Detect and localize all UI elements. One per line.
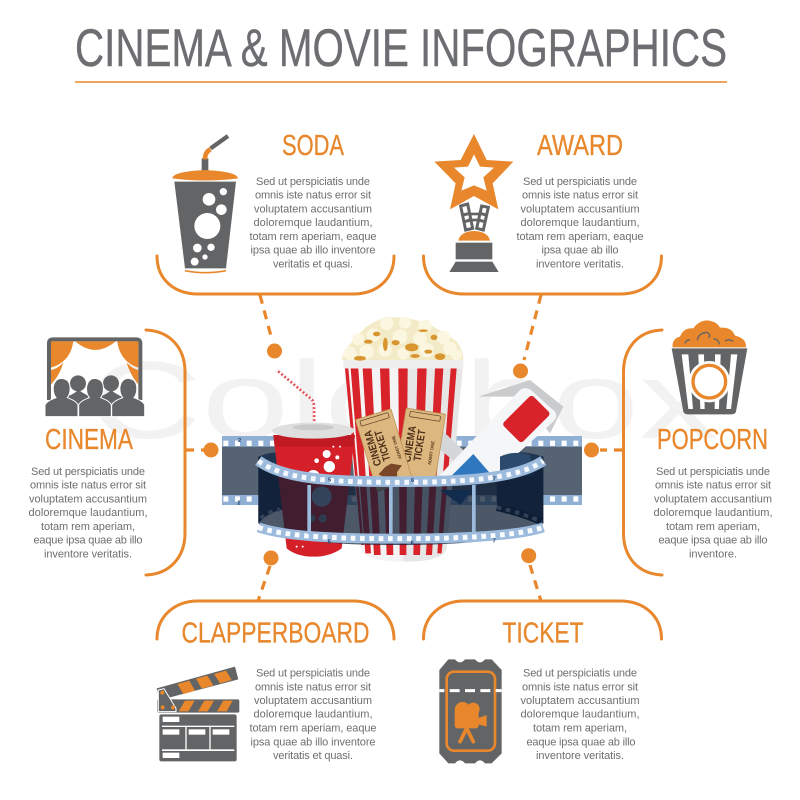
text block: cinema: totam rem aperiam, <box>41 521 135 533</box>
text block: cinema: omnis iste natus error sit <box>30 480 146 492</box>
film loop front: 6 <box>411 478 414 484</box>
text block: popcorn: Sed ut perspiciatis unde <box>656 466 770 478</box>
film loop front <box>258 457 543 546</box>
icon: award star trophy <box>434 134 513 272</box>
text block: clapperboard: doloremque laudantium, <box>254 709 372 721</box>
text block: soda: doloremque laudantium, <box>254 217 372 229</box>
text block: popcorn: totam rem aperiam, <box>666 521 760 533</box>
text block: cinema: doloremque laudantium, <box>28 507 148 519</box>
panel: clapperboard <box>157 550 394 762</box>
film loop front: 5 <box>328 477 331 483</box>
movie tickets: TICKET <box>373 428 393 462</box>
text block: clapperboard: voluptatem accusantium <box>254 695 372 707</box>
text block: clapperboard: omnis iste natus error sit <box>255 681 371 693</box>
popcorn bucket <box>343 360 463 562</box>
text block: clapperboard: Sed ut perspiciatis unde <box>256 668 370 680</box>
back film strip: 2 <box>238 438 241 444</box>
text block: award: Sed ut perspiciatis unde <box>523 176 637 188</box>
film loop back <box>258 451 543 523</box>
film loop front: 7 <box>493 476 496 482</box>
text block: clapperboard <box>250 668 376 762</box>
text block: popcorn: doloremque laudantium, <box>654 507 772 519</box>
text block: soda: veritatis et quasi. <box>273 259 353 271</box>
film loop front: 6 <box>411 540 414 546</box>
icon: soda cup <box>172 136 238 273</box>
back film strip <box>222 436 582 506</box>
movie tickets: ADMIT ONE <box>391 435 403 460</box>
text block: clapperboard: ipsa quae ab illo inventore <box>250 736 376 748</box>
panel: award <box>424 130 662 378</box>
movie tickets: CINEMA <box>401 425 419 463</box>
text block: award: totam rem aperiam, eaque <box>516 231 644 243</box>
bracket and connector: soda <box>157 256 394 358</box>
text block: award: ipsa quae ab illo <box>542 245 618 257</box>
movie tickets <box>355 408 446 491</box>
text block: popcorn: inventore. <box>689 549 737 561</box>
text block: award: voluptatem accusantium <box>520 203 640 215</box>
bracket and connector: clapperboard <box>157 550 394 639</box>
heading: award: AWARD <box>537 130 623 162</box>
text block: ticket: totam rem aperiam, <box>533 722 627 734</box>
text block: soda: ipsa quae ab illo inventore <box>250 245 376 257</box>
text block: cinema <box>28 466 148 561</box>
text block: cinema: voluptatem accusantium <box>29 493 147 505</box>
panel: popcorn <box>584 320 772 575</box>
popcorn <box>342 317 463 361</box>
text block: cinema: Sed ut perspiciatis unde <box>31 466 145 478</box>
soda cup <box>272 370 355 557</box>
bracket and connector: cinema <box>146 330 218 575</box>
movie tickets: CINEMA <box>362 429 384 467</box>
text block: soda: omnis iste natus error sit <box>255 190 371 202</box>
text block: ticket: inventore veritatis. <box>536 750 624 762</box>
text block: award: doloremque laudantium, <box>520 217 640 229</box>
text block: ticket: omnis iste natus error sit <box>522 681 638 693</box>
text block: popcorn <box>654 466 772 561</box>
icon: cinema audience <box>45 339 145 417</box>
central illustration: film, soda, popcorn, tickets, 3D glasses <box>222 317 582 562</box>
text block: ticket <box>520 668 640 762</box>
film loop front: 5 <box>328 540 331 546</box>
panel: ticket <box>424 548 662 763</box>
film loop front: 7 <box>493 539 496 545</box>
text block: ticket: eaque ipsa quae ab illo <box>526 736 636 748</box>
heading: popcorn: POPCORN <box>657 424 768 456</box>
heading: ticket: TICKET <box>502 618 584 650</box>
text block: ticket: Sed ut perspiciatis unde <box>523 668 637 680</box>
bracket and connector: award <box>424 256 662 378</box>
panel: cinema <box>28 330 218 575</box>
text block: award <box>516 176 644 271</box>
3D glasses <box>437 380 563 505</box>
text block: soda: voluptatem accusantium <box>254 203 372 215</box>
text block: clapperboard: totam rem aperiam, eaque <box>250 722 376 734</box>
movie tickets: TICKET <box>412 428 429 462</box>
heading: soda: SODA <box>282 130 344 162</box>
movie tickets: ADMIT ONE <box>427 440 436 465</box>
text block: award: omnis iste natus error sit <box>522 190 638 202</box>
text block: cinema: inventore veritatis. <box>44 549 132 561</box>
text block: soda: totam rem aperiam, eaque <box>250 231 376 243</box>
text block: clapperboard: veritatis et quasi. <box>273 750 353 762</box>
icon: popcorn bucket <box>672 320 747 414</box>
back film strip: 2 <box>237 500 240 506</box>
text block: soda: Sed ut perspiciatis unde <box>256 176 370 188</box>
text block: soda <box>250 176 376 271</box>
bracket and connector: popcorn <box>584 330 662 575</box>
heading: clapperboard: CLAPPERBOARD <box>182 618 370 650</box>
text block: popcorn: eaque ipsa quae ab illo <box>658 535 768 547</box>
icon: ticket <box>439 659 502 763</box>
panel: soda <box>157 130 394 358</box>
text block: popcorn: voluptatem accusantium <box>654 493 772 505</box>
text block: popcorn: omnis iste natus error sit <box>655 480 771 492</box>
text block: award: inventore veritatis. <box>536 259 624 271</box>
icon: clapperboard <box>157 667 239 761</box>
heading: cinema: CINEMA <box>45 424 134 456</box>
text block: cinema: eaque ipsa quae ab illo <box>34 535 142 547</box>
bracket and connector: ticket <box>424 548 662 639</box>
text block: ticket: doloremque laudantium, <box>520 709 640 721</box>
watermark: Colorbox <box>88 339 718 462</box>
text block: ticket: voluptatem accusantium <box>520 695 640 707</box>
